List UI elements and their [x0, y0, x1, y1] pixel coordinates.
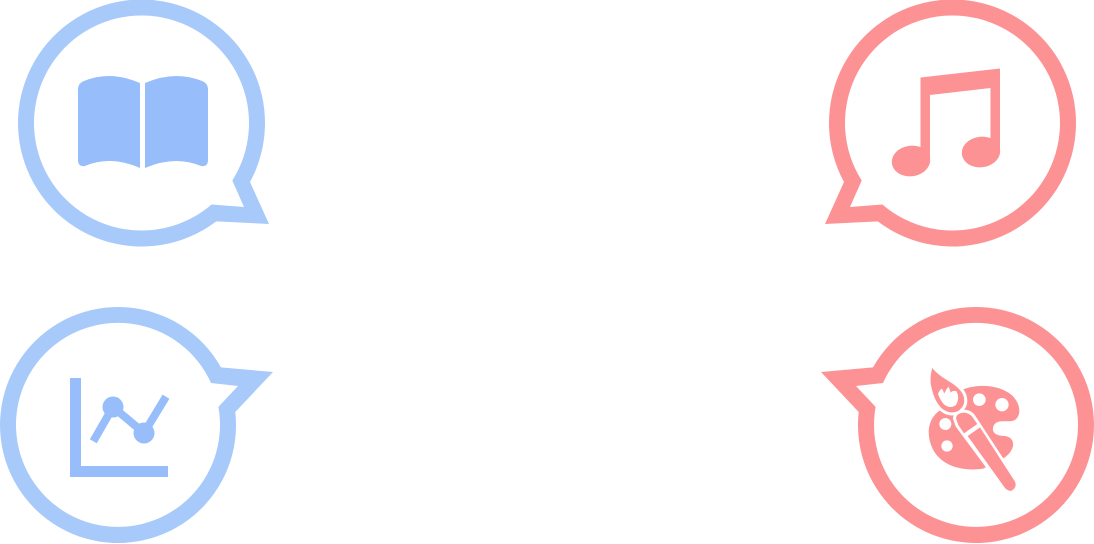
- panel: chart speech bubble: [0, 307, 273, 543]
- bubble outline: blue bottom left: [0, 307, 273, 543]
- icon: open book: [78, 76, 208, 168]
- bubble outline: red top right: [825, 0, 1076, 246]
- icon: line chart: [70, 378, 168, 477]
- panel: art speech bubble: [821, 307, 1094, 543]
- icon: music notes: [890, 68, 1002, 179]
- bubble outline: blue top left: [18, 0, 269, 246]
- icon: palette and brush: [929, 368, 1019, 491]
- panel: book speech bubble: [18, 0, 269, 246]
- bubble outline: red bottom right: [821, 307, 1094, 543]
- panel: music speech bubble: [825, 0, 1076, 246]
